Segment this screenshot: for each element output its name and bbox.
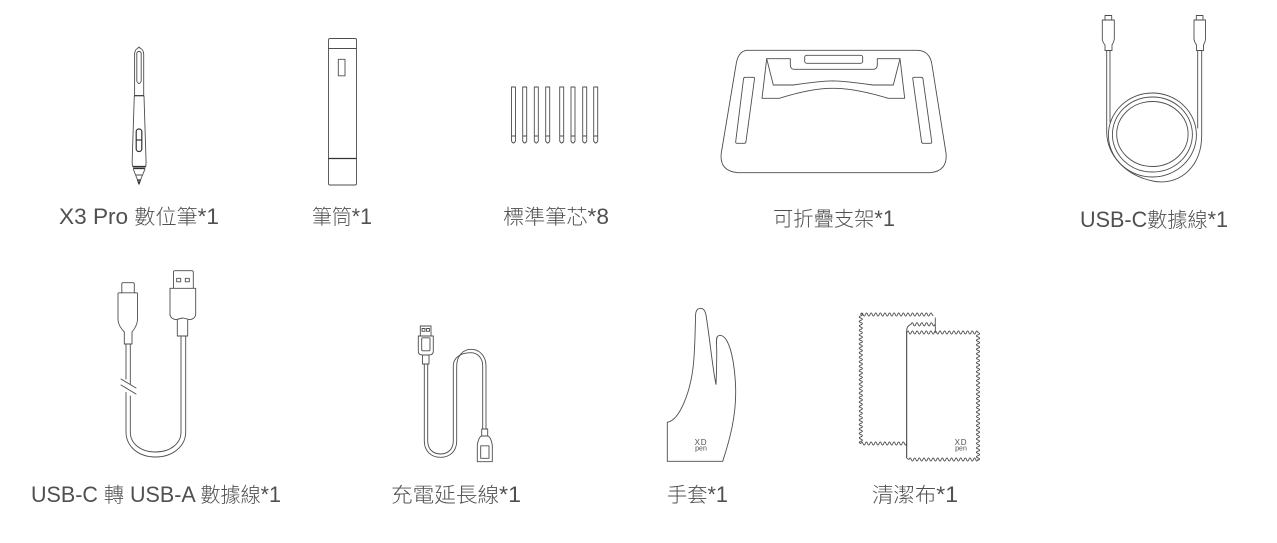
logo: XD pen on glove: XD	[695, 438, 707, 447]
icon: extension cable	[418, 326, 492, 462]
icon: eight nibs	[512, 87, 598, 143]
label: stylus: X3 Pro 數位筆*1	[59, 204, 219, 229]
label: extension cable: 充電延長線 *1	[391, 482, 521, 507]
item: USB-C to USB-A cable	[31, 271, 281, 507]
item: foldable stand	[721, 50, 946, 231]
item: pen case	[312, 38, 372, 229]
label: USB-C to USB-A cable: USB-C 轉 USB-A 數據線*1	[31, 482, 281, 507]
icon: cleaning cloth	[859, 313, 980, 461]
item: glove	[667, 308, 736, 507]
item: standard nibs	[503, 87, 609, 229]
label: pen case: 筆筒*1	[312, 204, 372, 229]
label: standard nibs: 標準筆芯*8	[503, 204, 609, 229]
icon: X3 Pro stylus	[132, 47, 146, 184]
item: USB-C cable	[1080, 16, 1228, 232]
icon: drawing glove	[667, 308, 736, 461]
item: stylus	[59, 47, 219, 229]
icon: USB-C to USB-A cable	[118, 271, 196, 457]
label: USB-C cable: USB-C數據線*1	[1080, 207, 1228, 232]
icon: pen case	[328, 38, 356, 185]
label: glove: 手套*1	[667, 482, 728, 507]
item: cleaning cloth	[859, 313, 980, 507]
icon: drawing glove: pen	[695, 446, 707, 452]
icon: USB-C cable	[1102, 16, 1206, 182]
icon: cleaning cloth: pen	[955, 446, 967, 452]
icon: foldable stand	[721, 50, 946, 173]
item: charging extension cable	[391, 326, 521, 507]
label: cleaning cloth: 清潔布*1	[872, 482, 958, 507]
logo: XD pen on cloth: XD	[955, 438, 967, 447]
label: foldable stand: 可折疊支架*1	[773, 206, 895, 231]
